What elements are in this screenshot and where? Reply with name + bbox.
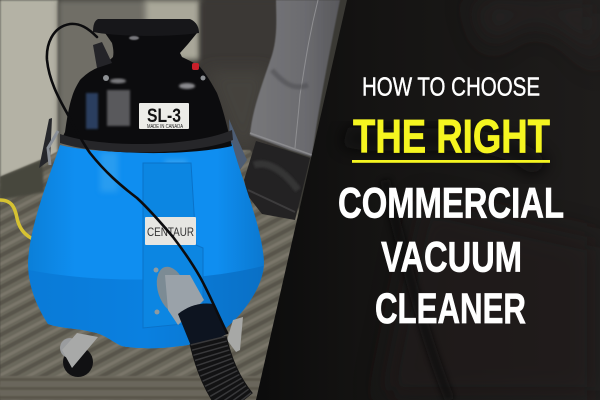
brand label: CENTAUR xyxy=(147,225,194,239)
power cord xyxy=(47,24,227,333)
rim xyxy=(60,130,233,152)
headline line: vacuum: VACUUM xyxy=(381,234,522,282)
boot xyxy=(244,141,310,220)
headline line: the right: THE RIGHT xyxy=(353,110,550,163)
yellow underline xyxy=(352,160,550,163)
caster wheel xyxy=(60,333,98,377)
corrugated black hose xyxy=(208,340,238,400)
hose cuff xyxy=(178,303,227,351)
background: carpet floor xyxy=(0,150,300,400)
dome screws xyxy=(103,75,109,81)
blurred photo shadows in panel xyxy=(470,0,600,70)
yellow extension cord xyxy=(0,200,31,238)
dome highlights xyxy=(107,90,130,126)
hose coupling xyxy=(151,263,204,325)
model label: MADE IN CANADA xyxy=(147,124,184,130)
lid xyxy=(93,19,199,36)
power button xyxy=(192,63,199,70)
vacuum cleaner xyxy=(20,19,270,400)
model label: SL-3 xyxy=(147,106,181,127)
panel screws xyxy=(154,268,158,272)
power plug xyxy=(93,42,112,68)
blue tank body xyxy=(20,143,270,350)
background: hallway wall xyxy=(0,0,350,400)
headline xyxy=(338,72,564,333)
dark diagonal text panel xyxy=(256,0,600,400)
headline line: how to choose: HOW TO CHOOSE xyxy=(362,72,540,102)
black dome xyxy=(60,19,233,153)
right caster bracket xyxy=(227,317,243,352)
front panel xyxy=(143,163,203,328)
brand label xyxy=(145,217,196,245)
left latch xyxy=(39,118,58,168)
right latch xyxy=(229,119,247,170)
person's leg and boot xyxy=(244,0,340,220)
jeans xyxy=(250,0,340,157)
model label xyxy=(139,103,189,130)
headline line: cleaner: CLEANER xyxy=(375,285,526,333)
